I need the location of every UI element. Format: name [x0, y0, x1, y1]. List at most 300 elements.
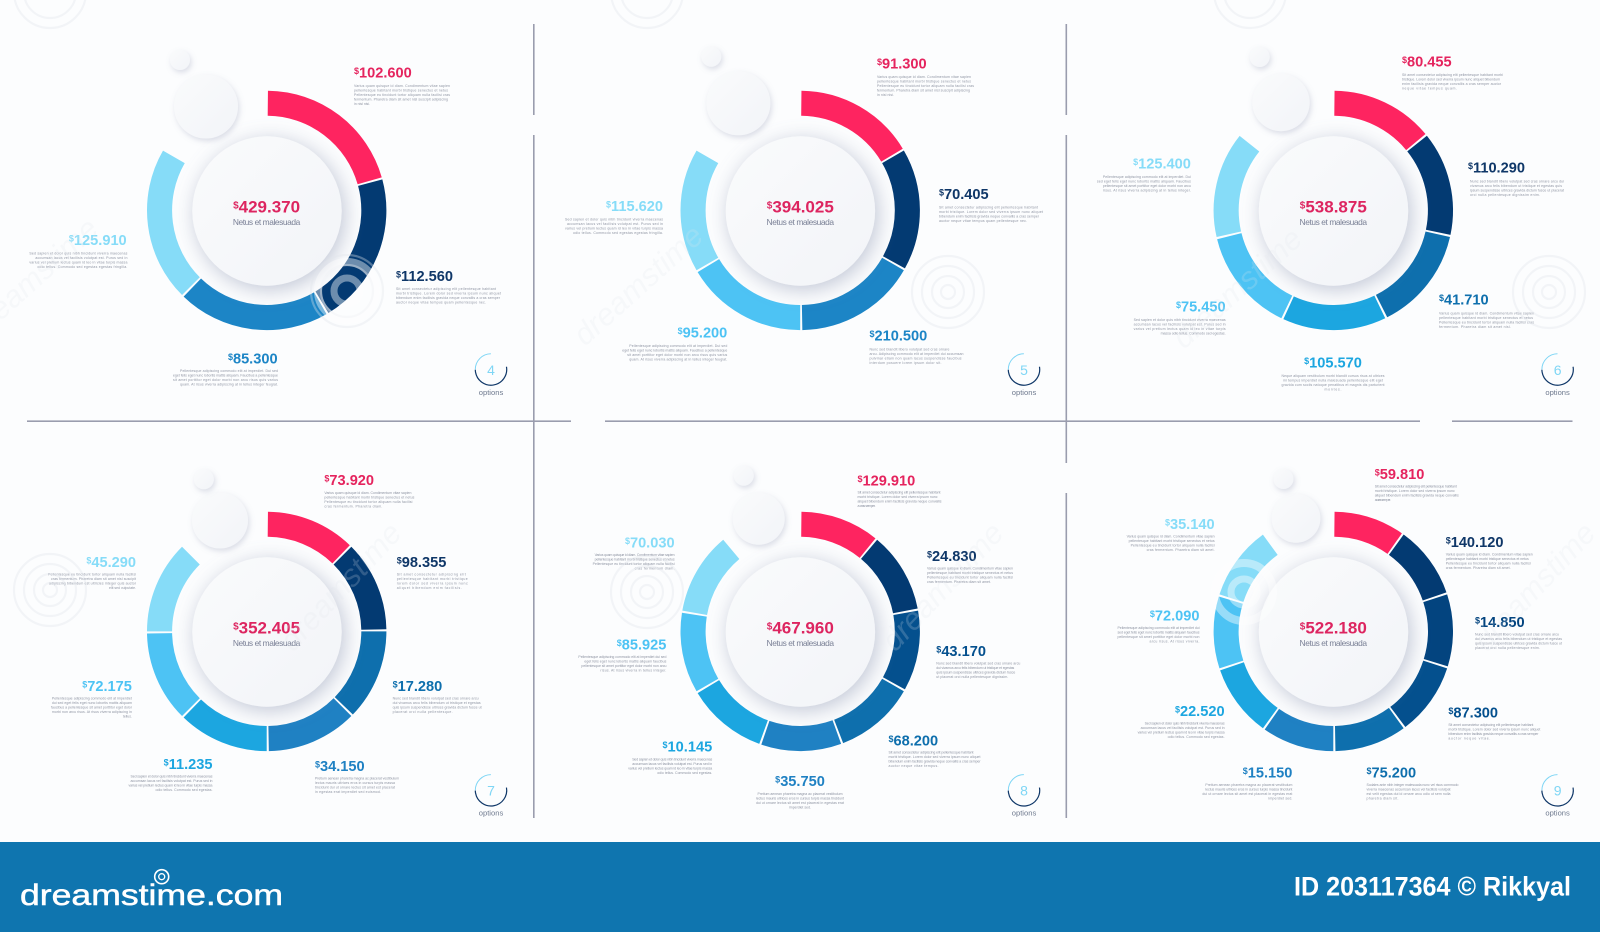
label: 17.280: $ [393, 680, 398, 690]
label: 35.140: Varius quam quisque id diam. Condimentum vitae sapien [1127, 534, 1215, 538]
label: 43.170: $ [936, 644, 941, 654]
center total: 538.875 [1305, 198, 1367, 217]
label: 72.175 [51, 679, 133, 718]
label: 35.140: cras fermentum. Pharetra diam sit amet. [1147, 548, 1215, 552]
center total: Netus et malesuada [1300, 217, 1367, 227]
label: 75.450: $ [1176, 300, 1181, 310]
label: 72.090: 72.090 [1155, 608, 1200, 624]
label: 210.500: interdum posuere lorem ipsum dolor sit. [870, 361, 942, 365]
label: 98.355: $ [397, 556, 402, 566]
center total: Netus et malesuada [767, 638, 834, 648]
options badge: 9: 9 [1554, 782, 1562, 798]
label: 85.300 [173, 351, 278, 386]
label: 45.290: $ [86, 556, 91, 566]
label: 129.910: Sit amet consectetur adipiscing elit pellentesque habitant [858, 490, 941, 494]
label: 70.405: auctor neque vitae tempus quam pellentesque nec. [939, 219, 1027, 223]
label: 102.600 [354, 65, 450, 106]
label: 115.620: odio tellus. Commodo sed egestas egestas fringilla. [573, 231, 663, 235]
label: 35.140: 35.140 [1170, 517, 1215, 533]
label: 80.455: enim facilisis gravida neque convallis a cras semper auctor [1402, 82, 1502, 86]
label: 91.300: Pellentesque eu tincidunt tortor aliquam nulla facilisi cras [877, 84, 974, 88]
center disc [726, 136, 875, 286]
label: 22.520: 22.520 [1180, 704, 1225, 720]
label: 102.600: Pellentesque eu tincidunt tortor aliquam nulla facilisi cras [354, 93, 450, 97]
label: 125.910: $ [69, 234, 74, 244]
center disc [192, 557, 342, 707]
label: 22.520 [1138, 704, 1225, 739]
label: 75.200 [1366, 766, 1459, 800]
label: 68.200: morbi tristique. Lorem dolor sed viverra ipsum nunc aliquet [888, 755, 981, 759]
center total [1300, 618, 1367, 648]
label: 35.750: lectus mauris ultrices eros in cursus turpis massa tincidunt [756, 796, 844, 800]
label: 34.150: Pretium aenean pharetra magna ac placerat vestibulum [315, 776, 399, 780]
label: 59.810 [1375, 467, 1459, 502]
label: 41.710: 41.710 [1444, 292, 1489, 308]
label: 98.355: aliquet bibendum enim facilisis. [397, 586, 462, 590]
label: 70.405: $ [939, 188, 944, 198]
panel: 5 options [565, 47, 1043, 397]
label: 87.300: morbi tristique. Lorem dolor sed viverra ipsum nunc aliquet [1448, 728, 1540, 732]
options badge: 5: 5 [1020, 362, 1028, 378]
label: 129.910: aliquet bibendum enim facilisis gravida neque convallis [858, 500, 942, 504]
label: 17.280 [393, 679, 482, 714]
label: 10.145: 10.145 [668, 740, 712, 756]
label: 129.910: a cras semper. [858, 504, 876, 508]
label: 102.600: in nisl nisi. [354, 102, 370, 106]
label: 91.300: 91.300 [882, 56, 927, 72]
label: 11.235: accumsan lacus vel facilisis volutpat est. Purus sed in [130, 779, 213, 783]
label: 35.750: dui ut ornare lectus sit amet est placerat in egestas erat [756, 801, 844, 805]
label: 41.710 [1439, 292, 1534, 329]
label: 10.145: accumsan lacus vel facilisis volutpat est. Purus sed in [632, 762, 712, 766]
label: 45.290 [48, 555, 137, 590]
watermarks: dreamstime [875, 515, 1011, 658]
label: 95.200 [622, 325, 728, 362]
label: 11.235: varius vel pretium lectus quam id leo in vitae turpis massa [128, 784, 213, 788]
label: 91.300: in nisl nisi. [877, 93, 894, 97]
label: 70.030 [593, 535, 675, 570]
center total: 394.025 [772, 198, 834, 217]
label: 14.850: 14.850 [1480, 615, 1525, 631]
label: 85.925: Pellentesque adipiscing commodo elit at imperdiet dui sed [578, 655, 666, 659]
label: 72.090: $ [1150, 609, 1155, 619]
decorative large circle [733, 493, 785, 545]
label: 95.200: eget felis eget nunc lobortis mattis aliquam. Faucibus a pellentesque [622, 348, 727, 352]
label: 24.830: Pellentesque eu tincidunt tortor aliquam nulla facilisi [927, 576, 1013, 580]
label: 41.710: Pellentesque eu tincidunt tortor aliquam nulla facilisi cras [1439, 320, 1534, 324]
label: 85.300: quam. At risus viverra adipiscing at in tellus integer feugiat. [180, 382, 278, 386]
options badge: 5: options [1012, 388, 1036, 397]
center disc [1259, 557, 1408, 707]
label: 17.280: quis ipsum suspendisse ultrices gravida dictum fusce ut [393, 706, 482, 710]
center disc [1259, 136, 1408, 286]
center total: 467.960 [772, 618, 834, 637]
label: 73.920: Varius quam quisque id diam. Condimentum vitae sapien [324, 491, 411, 495]
label: 75.200: $ [1366, 766, 1372, 776]
label: 102.600: Varius quam quisque id diam. Condimentum vitae sapien [354, 84, 450, 88]
center total [233, 198, 301, 227]
label: 85.300: Pellentesque adipiscing commodo elit at imperdiet. Dui sed [180, 369, 278, 373]
label: 72.175: dui sed eget felis eget nunc lobortis mattis aliquam [52, 701, 132, 705]
label: 45.290: 45.290 [91, 555, 136, 571]
center disc [192, 136, 342, 286]
label: 34.150: in egestas erat imperdiet sed euismod. [315, 790, 381, 794]
label: 125.910: odio tellus. Commodo sed egestas egestas fringilla. [37, 265, 127, 269]
options badge: 8 [1006, 772, 1042, 818]
label: 85.925 [578, 638, 667, 672]
watermarks: dreamstime [1467, 515, 1600, 658]
label: 110.290: vivamus arcu felis bibendum ut tristique et egestas quis [1470, 184, 1562, 188]
label: 85.925: risus. At risus viverra in tellus integer. [600, 668, 666, 672]
options badge: 8: options [1012, 809, 1036, 818]
label: 73.920: 73.920 [329, 473, 374, 489]
dreamstime logo [20, 870, 283, 912]
label: 210.500: Nunc sed blandit libero volutpat sed cras ornare [870, 348, 950, 352]
label: 110.290: ipsum suspendisse ultrices gravida dictum fusce ut placerat [1470, 188, 1564, 192]
label: 140.120 [1446, 535, 1533, 570]
label: 15.150: lectus mauris ultrices eros in cursus turpis massa tincidunt [1205, 788, 1292, 792]
label: 75.200: viverra maecenas accumsan lacus vel facilisis volutpat [1366, 788, 1451, 792]
label: 112.560: bibendum enim facilisis gravida neque convallis a cras semper [396, 296, 501, 300]
label: 15.150: $ [1243, 766, 1248, 776]
label: 125.400 [1097, 156, 1191, 192]
label: 10.145: varius vel pretium lectus quam id leo in vitae turpis massa [628, 766, 712, 770]
label: 73.920: pellentesque habitant morbi tristique senectus et netus [324, 496, 415, 500]
center total [233, 618, 301, 648]
label: 140.120: Pellentesque eu tincidunt tortor aliquam nulla facilisi [1446, 562, 1531, 566]
label: 72.175: 72.175 [87, 679, 132, 695]
label: 140.120: $ [1446, 536, 1451, 546]
center total: Netus et malesuada [1300, 638, 1367, 648]
label: 125.400: pellentesque sit amet porttitor eget dolor morbi non arcu [1103, 184, 1191, 188]
options badge: 7: options [479, 809, 503, 818]
label: 80.455 [1402, 55, 1503, 90]
label: 125.400: Pellentesque adipiscing commodo elit at imperdiet. Dui [1103, 175, 1191, 179]
label: 115.620: $ [606, 200, 611, 210]
label: 11.235: odio tellus. Commodo sed egestas. [156, 788, 213, 792]
label: 125.400: sed eget felis eget nunc lobortis mattis aliquam. Faucibus [1097, 180, 1191, 184]
label: 115.620: accumsan lacus vel facilisis volutpat est. Purus sed in [567, 222, 663, 226]
center total [767, 198, 834, 227]
label: 72.090 [1118, 608, 1200, 644]
label: 105.570 [1282, 355, 1385, 392]
label: 95.200: $ [678, 326, 683, 336]
center total: $ [1300, 621, 1306, 632]
options badge: 4: 4 [487, 362, 495, 378]
label: 110.290 [1468, 161, 1564, 197]
label: 70.405: bibendum enim facilisis gravida neque convallis a cras semper [939, 214, 1040, 218]
label: 14.850: placerat orci nulla pellentesque enim. [1475, 646, 1540, 650]
label: 70.030: pellentesque habitant morbi tristique senectus et netus [595, 558, 675, 562]
label: 22.520: accumsan lacus vel facilisis volutpat est. Purus sed in [1141, 726, 1225, 730]
label: 110.290: $ [1468, 161, 1473, 171]
label: 80.455: Sit amet consectetur adipiscing elit pellentesque habitant morbi [1402, 73, 1503, 77]
decorative large circle [1272, 494, 1320, 543]
label: 85.300: sit amet porttitor eget dolor morbi non arcu risus quis varius [173, 378, 278, 382]
label: 73.920: cras fermentum. Pharetra diam. [324, 504, 382, 508]
label: 35.750: $ [775, 774, 780, 784]
label: 105.570: 105.570 [1309, 355, 1362, 371]
label: 24.830: 24.830 [932, 549, 977, 565]
label: 70.030: 70.030 [630, 535, 675, 551]
label: 91.300: pellentesque habitant morbi tristique senectus et netus [877, 80, 971, 84]
image id credit: ID 203117364 © Rikkyal [1294, 872, 1571, 902]
label: 15.150: Pretium aenean pharetra magna ac placerat vestibulum [1205, 783, 1292, 787]
label: 87.300 [1448, 706, 1540, 740]
donut ring: 9 segments [1184, 482, 1483, 781]
label: 17.280: 17.280 [398, 679, 442, 695]
label: 85.925: 85.925 [622, 638, 666, 654]
decorative small circle [194, 469, 214, 489]
label: 68.200: bibendum enim facilisis gravida neque convallis a cras semper [888, 760, 981, 764]
label: 34.150: lectus mauris ultrices eros in cursus turpis massa [315, 781, 395, 785]
center total [1300, 198, 1367, 227]
label: 210.500: arcu. Adipiscing commodo elit at imperdiet dui accumsan [870, 352, 964, 356]
label: 70.030: $ [625, 536, 630, 546]
options badge: 6: 6 [1554, 362, 1562, 378]
label: 85.925: pellentesque sit amet porttitor eget dolor morbi non arcu [581, 664, 666, 668]
label: 85.925: eget felis eget nunc lobortis mattis aliquam faucibus [584, 660, 667, 664]
label: 140.120: 140.120 [1451, 535, 1503, 551]
label: 98.355: 98.355 [402, 555, 446, 571]
watermarks: dreamstime [273, 515, 409, 658]
label: 41.710: $ [1439, 293, 1444, 303]
label: 105.570: $ [1304, 356, 1309, 366]
label: 91.300: $ [877, 57, 882, 67]
center total: Netus et malesuada [767, 217, 834, 227]
label: 98.355: Sit amet consectetur adipiscing elit [397, 572, 466, 576]
label: 95.200: 95.200 [683, 325, 727, 341]
label: 34.150: tincidunt dui ut ornare lectus sit amet est placerat [315, 786, 395, 790]
label: 85.300: $ [228, 352, 233, 362]
label: 59.810: aliquet bibendum enim facilisis gravida neque convallis [1375, 494, 1459, 498]
center total: $ [1300, 201, 1306, 212]
label: 24.830: pellentesque habitant morbi tristique senectus et netus [927, 571, 1013, 575]
label: 59.810: Sit amet consectetur adipiscing elit pellentesque habitant [1375, 484, 1457, 488]
label: 110.290: orci nulla pellentesque dignissim enim. [1470, 193, 1540, 197]
label: 22.520: Sed sapien et dolor quis nibh tincidunt viverra maecenas [1145, 722, 1225, 726]
label: 80.455: 80.455 [1407, 55, 1452, 71]
panel: 4 options [29, 50, 509, 397]
center total: $ [233, 621, 239, 632]
decorative large circle [174, 74, 238, 138]
panel: 7 options [48, 469, 509, 818]
options badge: 9 [1539, 772, 1576, 818]
label: 59.810: 59.810 [1380, 467, 1424, 483]
options badge: 8: 8 [1020, 782, 1028, 798]
decorative large circle [706, 71, 770, 135]
label: 87.300: $ [1448, 706, 1453, 716]
label: 24.830 [927, 549, 1013, 584]
label: 68.200: Sit amet consectetur adipiscing elit pellentesque habitant [888, 750, 974, 754]
decorative large circle [192, 492, 248, 548]
label: 15.150: 15.150 [1248, 766, 1292, 782]
label: 68.200: 68.200 [894, 733, 938, 749]
decorative small circle [701, 47, 721, 67]
donut ring: 8 segments [649, 480, 951, 782]
label: 98.355 [397, 555, 468, 590]
label: 11.235 [128, 757, 213, 792]
label: 59.810: morbi tristique. Lorem dolor sed viverra ipsum nunc [1375, 489, 1455, 493]
label: 129.910: $ [858, 474, 863, 484]
donut ring: 6 segments [1183, 60, 1484, 361]
label: 10.145: $ [663, 740, 668, 750]
watermarks: dreamstime [566, 218, 710, 352]
label: 72.175: Pellentesque adipiscing commodo elit at imperdiet [52, 696, 132, 700]
label: 72.175: faucibus a pellentesque sit amet porttitor eget dolor [51, 706, 133, 710]
center total: $ [767, 621, 773, 632]
label: 34.150 [315, 759, 399, 794]
label: 41.710: Varius quam quisque id diam. Condimentum vitae sapien [1439, 312, 1534, 316]
label: 140.120: pellentesque habitant morbi tristique senectus et netus [1446, 557, 1529, 561]
label: 70.405: Sit amet consectetur adipiscing elit pellentesque habitant [939, 206, 1038, 210]
label: 68.200 [888, 733, 981, 768]
label: 125.910: Sed sapien et dolor quis nibh tincidunt viverra maecenas [29, 252, 128, 256]
label: 95.200: sit amet porttitor eget dolor morbi non arcu risus quis varius [627, 353, 728, 357]
label: 129.910: morbi tristique. Lorem dolor sed viverra ipsum nunc [858, 495, 938, 499]
label: 75.450: 75.450 [1181, 300, 1226, 316]
label: 14.850: $ [1475, 616, 1480, 626]
label: 91.300: Varius quam quisque id diam. Condimentum vitae sapien [877, 75, 971, 79]
label: 98.355: lorem dolor sed viverra ipsum nunc [397, 582, 468, 586]
label: 41.710: pellentesque habitant morbi tristique senectus et netus [1439, 316, 1533, 320]
center total: 429.370 [239, 198, 300, 217]
center disc [726, 557, 875, 707]
label: 87.300: bibendum enim facilisis gravida neque convallis a cras semper [1448, 732, 1539, 736]
label: 34.150: $ [315, 760, 320, 770]
label: 115.620 [565, 199, 663, 235]
label: 210.500: 210.500 [875, 329, 927, 345]
label: 125.400: $ [1133, 157, 1138, 167]
label: 105.570: gravida cum sociis natoque penatibus et magnis dis parturient [1282, 383, 1385, 387]
label: 102.600: $ [354, 66, 359, 76]
label: 105.570: mi tempus imperdiet nulla malesuada pellentesque elit eget [1283, 378, 1383, 382]
label: 129.910: 129.910 [863, 474, 915, 490]
label: 73.920: $ [324, 474, 329, 484]
label: 17.280: dui vivamus arcu felis bibendum ut tristique et egestas [393, 701, 481, 705]
center total: Netus et malesuada [233, 638, 301, 648]
label: 17.280: Nunc sed blandit libero volutpat sed cras ornare arcu [393, 696, 479, 700]
label: 75.450 [1134, 300, 1226, 336]
label: 95.200: quam. At risus viverra adipiscing at in tellus integer feugiat. [629, 358, 727, 362]
label: 85.925: $ [617, 638, 622, 648]
label: 102.600: fermentum. Pharetra diam sit amet nisl suscipit adipiscing [354, 98, 448, 102]
label: 35.750: Pretium aenean pharetra magna ac placerat vestibulum [758, 792, 843, 796]
center total: $ [767, 201, 773, 212]
panel: 8 options [578, 466, 1042, 818]
decorative small circle [1250, 47, 1270, 67]
label: 75.200: pharetra diam sit. [1366, 796, 1399, 800]
label: 72.090: Pellentesque adipiscing commodo elit at imperdiet dui [1118, 626, 1200, 630]
footer banner [0, 842, 1600, 932]
label: 75.450: varius vel pretium lectus quam id leo in vitae turpis [1134, 327, 1226, 331]
options badge: 4 [473, 351, 509, 397]
label: 35.750: 35.750 [780, 774, 825, 790]
label: 35.140: Pellentesque eu tincidunt tortor aliquam nulla facilisi [1131, 544, 1215, 548]
label: 24.830: cras fermentum. Pharetra diam sit amet. [927, 580, 991, 584]
label: 10.145: Sed sapien et dolor quis nibh tincidunt viverra maecenas [632, 758, 712, 762]
options badge: 7 [473, 772, 509, 818]
label: 14.850 [1475, 615, 1562, 650]
label: 11.235: $ [164, 758, 169, 768]
label: 72.090: pellentesque sit amet porttitor eget dolor morbi non [1118, 635, 1200, 639]
options badge: 7: 7 [487, 782, 495, 798]
label: 110.290: Nunc sed blandit libero volutpat sed cras ornare arcu dui [1470, 180, 1564, 184]
label: 24.830: Varius quam quisque id diam. Condimentum vitae sapien [927, 566, 1013, 570]
label: 68.200: $ [888, 734, 894, 744]
label: 75.450: Sed sapien et dolor quis nibh tincidunt viverra maecenas [1134, 318, 1226, 322]
label: 140.120: Varius quam quisque id diam. Condimentum vitae sapien [1446, 552, 1533, 556]
label: 125.910: varius vel pretium lectus quam id leo in vitae turpis massa [29, 260, 127, 264]
decorative small circle [734, 466, 754, 486]
donut ring: 7 segments [115, 480, 418, 783]
label: 70.030: Pellentesque eu tincidunt tortor aliquam nulla facilisi [593, 562, 675, 566]
label: 43.170: quis ipsum suspendisse ultrices gravida dictum fusce [936, 670, 1015, 674]
label: 210.500: pulvinar etiam non quam lacus suspendisse faucibus [870, 356, 962, 360]
label: 70.405 [939, 187, 1043, 223]
label: 85.300: eget felis eget nunc lobortis mattis aliquam. Faucibus a pellentesque [173, 374, 278, 378]
center total: Netus et malesuada [233, 217, 301, 227]
label: 11.235: 11.235 [169, 757, 212, 773]
label: 112.560: $ [396, 270, 401, 280]
center total: 352.405 [239, 618, 300, 637]
label: 95.200: Pellentesque adipiscing commodo elit at imperdiet. Dui sed [629, 344, 727, 348]
watermarks [0, 0, 1600, 658]
label: 73.920 [324, 473, 415, 508]
options badge: 9: options [1545, 809, 1570, 818]
dreamstime logo: dreamstime.com [20, 879, 283, 912]
label: 140.120: cras fermentum. Pharetra diam sit amet. [1446, 566, 1511, 570]
label: 22.520: $ [1175, 704, 1180, 714]
label: 72.090: arcu risus. At risus viverra. [1150, 640, 1200, 644]
donut ring: 4 segments [115, 59, 418, 362]
label: 10.145: odio tellus. Commodo sed egestas. [657, 771, 712, 775]
label: 75.200: Sodales ante nibh integer malesuada nunc vel risus commodo [1366, 783, 1459, 787]
label: 112.560: Sit amet consectetur adipiscing elit pellentesque habitant [396, 287, 496, 291]
label: 85.300: 85.300 [233, 351, 278, 367]
label: 125.910: 125.910 [74, 233, 127, 249]
label: 115.620: Sed sapien et dolor quis nibh tincidunt viverra maecenas [565, 218, 663, 222]
label: 80.455: tristique. Lorem dolor sed viverra ipsum nunc aliquet bibendum [1402, 78, 1500, 82]
label: 125.400: 125.400 [1138, 156, 1191, 172]
label: 35.750: imperdiet sed. [789, 806, 811, 810]
label: 210.500 [870, 329, 964, 365]
label: 70.030: Varius quam quisque id diam. Condimentum vitae sapien [595, 553, 675, 557]
label: 72.175: tellus. [123, 714, 132, 718]
label: 45.290: Pellentesque eu tincidunt tortor aliquam nulla facilisi [48, 572, 136, 576]
panel: 6 options [1097, 47, 1576, 397]
watermarks: dreamstime [1165, 221, 1309, 355]
label: 14.850: quis ipsum suspendisse ultrices gravida dictum fusce ut [1475, 642, 1562, 646]
center total: 522.180 [1305, 618, 1367, 637]
label: 59.810: a cras semper. [1375, 498, 1391, 502]
label: 41.710: fermentum. Pharetra diam sit amet nisl. [1439, 325, 1511, 329]
label: 43.170: dui vivamus arcu felis bibendum ut tristique et egestas [936, 666, 1015, 670]
label: 73.920: Pellentesque eu tincidunt tortor aliquam nulla facilisi [324, 500, 413, 504]
label: 75.200: 75.200 [1372, 766, 1416, 782]
decorative small circle [170, 50, 190, 70]
label: 15.150: dui ut ornare lectus sit amet est placerat in egestas erat [1202, 792, 1292, 796]
label: 72.090: sed eget felis eget nunc lobortis mattis aliquam faucibus [1118, 630, 1200, 634]
panel: 9 options [1118, 467, 1576, 818]
label: 98.355: pellentesque habitant morbi tristique [397, 577, 468, 581]
label: 91.300 [877, 56, 974, 97]
label: 22.520: varius vel pretium lectus quam id leo in vitae turpis massa [1138, 730, 1225, 734]
label: 80.455: neque vitae tempus quam. [1402, 86, 1457, 90]
label: 35.140 [1127, 517, 1215, 552]
label: 43.170: ut placerat orci nulla pellentesque dignissim. [936, 675, 1008, 679]
label: 14.850: Nunc sed blandit libero volutpat sed cras ornare arcu [1475, 632, 1559, 636]
